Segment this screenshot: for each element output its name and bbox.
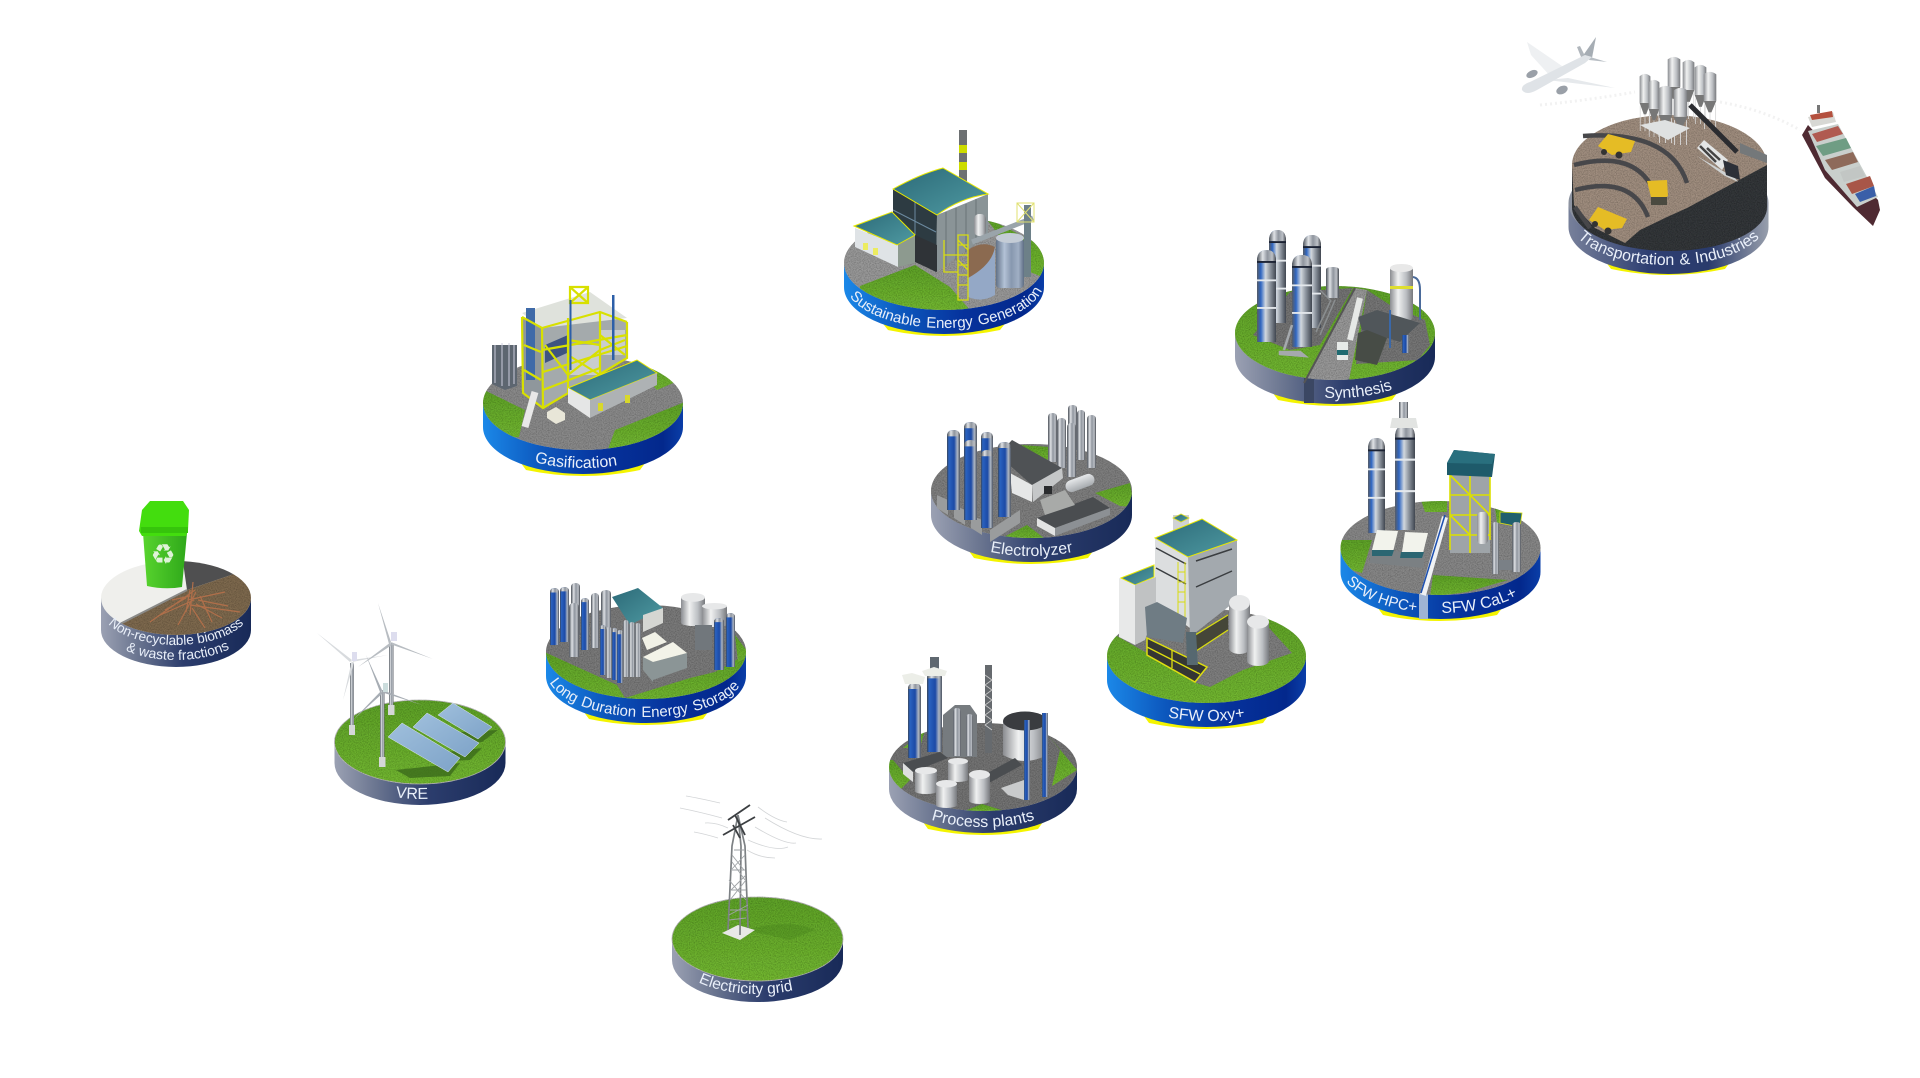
panel: SFW HPC+ and SFW CaL+ (1340, 402, 1540, 621)
label: SFW Oxy+ (1168, 707, 1244, 723)
icon: green recycling bin: ♻ (150, 538, 176, 571)
panel: Electricity grid (672, 796, 844, 1002)
panel: Transportation & Industries (1522, 37, 1880, 275)
label: Non-recyclable biomass (109, 618, 243, 646)
label: Process plants (932, 810, 1034, 830)
panel: Long Duration Energy Storage (546, 583, 746, 725)
icon: airplane (1522, 37, 1800, 130)
icon: wind turbines (317, 603, 433, 767)
icon: green recycling bin (139, 501, 189, 588)
plant: storage columns (550, 583, 735, 683)
icon: silos (1640, 57, 1767, 163)
label: Electricity grid (700, 973, 792, 998)
platform disc (885, 720, 1081, 835)
icon: container ship (1802, 105, 1880, 226)
plant: electrolyzer (937, 405, 1110, 542)
plant: synthesis columns (1256, 230, 1420, 365)
panel: Synthesis (1235, 230, 1435, 406)
icon: twigs (150, 582, 240, 628)
label: Sustainable Energy Generation (851, 288, 1042, 330)
label: Long Duration Energy Storage (550, 677, 738, 718)
platform disc (1230, 285, 1440, 406)
quarry terrain (1572, 115, 1767, 251)
panel: VRE (318, 604, 506, 805)
panel: Non-recyclable biomass & waste fractions (101, 501, 251, 667)
panel: Sustainable Energy Generation (844, 130, 1044, 336)
platform disc (483, 360, 683, 476)
platform disc (334, 700, 506, 805)
platform disc (672, 897, 843, 1002)
icon: concrete mixer truck (1697, 140, 1740, 182)
icon: electricity pylon (680, 796, 822, 940)
label line 2: & waste fractions (126, 642, 229, 660)
label: SFW CaL+ (1442, 590, 1515, 613)
platform disc (840, 215, 1050, 336)
icon: solar panels (388, 703, 498, 778)
label: VRE (396, 786, 428, 799)
plant: refinery (902, 657, 1048, 808)
platform disc (1335, 497, 1546, 621)
plant: power station (854, 130, 1034, 300)
label: Transportation & Industries (1580, 230, 1758, 266)
label: Gasification (536, 452, 616, 468)
panel: Electrolyzer (931, 405, 1132, 564)
platform disc (101, 561, 251, 667)
plant: HPC columns and CaL tower (1367, 402, 1522, 574)
platform disc (1568, 156, 1768, 275)
icon: mining trucks (1589, 134, 1668, 234)
platform disc (540, 600, 752, 725)
label: Synthesis (1325, 380, 1392, 402)
label: SFW HPC+ (1348, 576, 1416, 610)
platform disc (1107, 610, 1306, 729)
plant: gasifier structure (492, 287, 657, 427)
panel: Process plants (889, 657, 1077, 835)
label: Electrolyzer (991, 541, 1072, 559)
panel: Gasification (483, 286, 683, 476)
platform disc (928, 440, 1138, 564)
panel: SFW Oxy+ (1107, 514, 1306, 729)
plant: oxy-fuel boiler building (1119, 514, 1269, 682)
